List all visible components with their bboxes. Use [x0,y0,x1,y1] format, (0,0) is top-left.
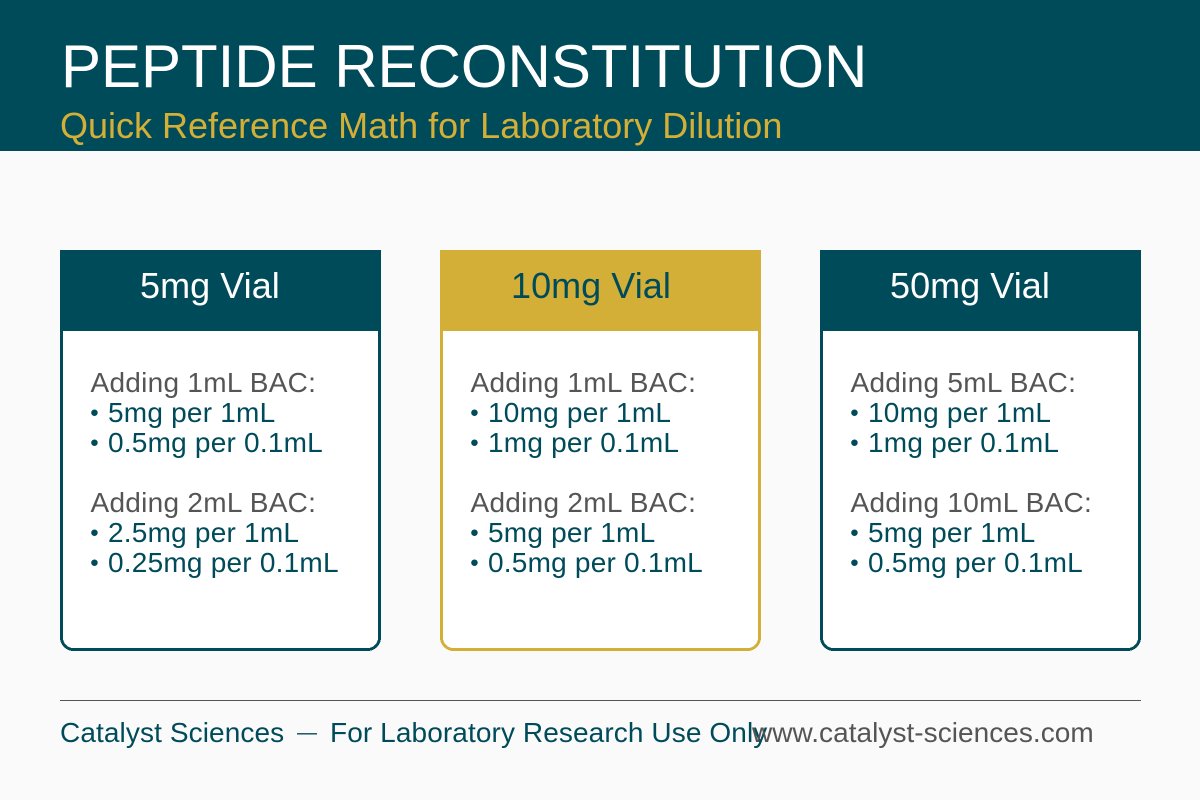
text block: 5mL BAC [850,367,1076,458]
footer: attribution: — [297,722,317,744]
text block: 2mL BAC: • [90,520,99,546]
text block: 5mL BAC: 1mg per 0.1mL [868,427,1059,458]
text block: 2mL BAC [470,487,703,578]
panel: 50mg vial [820,250,1141,650]
text block: 2mL BAC: • [470,520,479,546]
text block: 2mL BAC: • [470,550,479,576]
text block: 1mL BAC: Adding 1mL BAC: [470,367,696,398]
footer: attribution: For Laboratory Research Use Only [330,717,767,748]
panel header: 5mg vial [60,250,381,331]
text block: 10mL BAC: • [850,550,859,576]
text block: 10mL BAC [850,487,1092,578]
panel: 5mg vial [60,250,381,650]
text block: 1mL BAC: 10mg per 1mL [488,397,671,428]
text block: 1mL BAC: • [470,400,479,426]
text block: 1mL BAC: Adding 1mL BAC: [90,367,316,398]
subtitle: Quick Reference Math for Laboratory Dilution [60,105,782,146]
text block: 2mL BAC [90,487,339,578]
text block: 10mL BAC: • [850,520,859,546]
header banner [0,0,1200,151]
text block: 1mL BAC: 0.5mg per 0.1mL [108,427,323,458]
text block: 2mL BAC: 0.25mg per 0.1mL [108,547,339,578]
text block: 5mL BAC: • [850,400,859,426]
footer: website: www.catalyst-sciences.com [751,717,1094,748]
text block: 5mL BAC: Adding 5mL BAC: [850,367,1076,398]
text block: 5mL BAC: • [850,430,859,456]
text block: 2mL BAC: 5mg per 1mL [488,517,655,548]
text block: 1mL BAC: • [90,400,99,426]
panel header: 50mg vial [820,250,1141,331]
text block: 1mL BAC: 5mg per 1mL [108,397,275,428]
panel header: 10mg vial [440,250,761,331]
text block: 1mL BAC: 1mg per 0.1mL [488,427,679,458]
panel: 50mg vial: 50mg Vial [890,265,1050,306]
text block: 10mL BAC: 0.5mg per 0.1mL [868,547,1083,578]
panel: 10mg vial: 10mg Vial [511,265,671,306]
text block: 2mL BAC: 0.5mg per 0.1mL [488,547,703,578]
footer: attribution: Catalyst Sciences [60,717,284,748]
text block: 2mL BAC: Adding 2mL BAC: [90,487,316,518]
title: PEPTIDE RECONSTITUTION [61,33,867,100]
text block: 2mL BAC: Adding 2mL BAC: [470,487,696,518]
text block: 10mL BAC: Adding 10mL BAC: [850,487,1092,518]
text block: 5mL BAC: 10mg per 1mL [868,397,1051,428]
text block: 2mL BAC: 2.5mg per 1mL [108,517,299,548]
text block: 2mL BAC: • [90,550,99,576]
panel: 10mg vial [440,250,761,650]
text block: 1mL BAC [90,367,323,458]
text block: 10mL BAC: 5mg per 1mL [868,517,1035,548]
panel: 5mg vial: 5mg Vial [140,265,280,306]
text block: 1mL BAC: • [90,430,99,456]
text block: 1mL BAC [470,367,696,458]
text block: 1mL BAC: • [470,430,479,456]
